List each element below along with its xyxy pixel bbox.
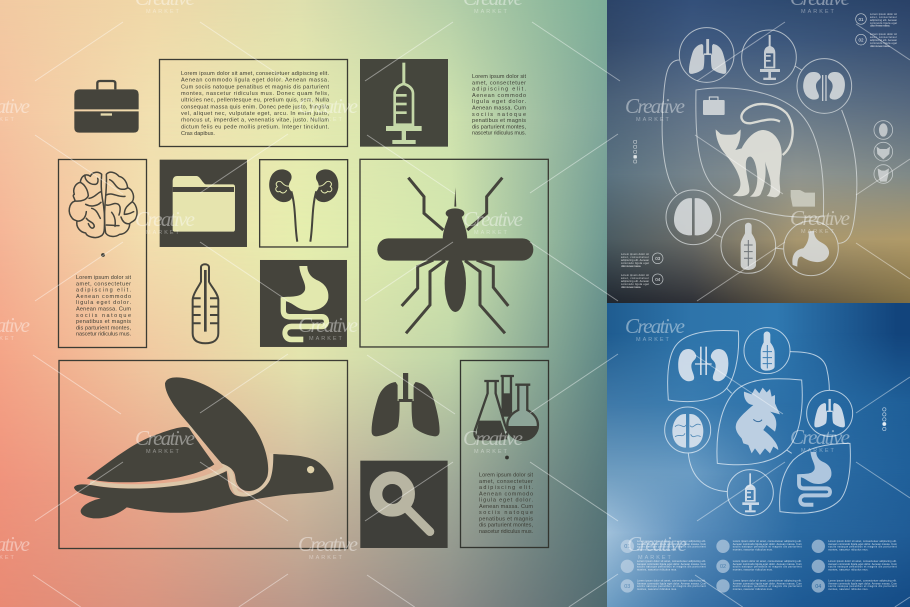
legend: bottom right numbers and text: [624, 540, 897, 591]
marker dot: [101, 253, 105, 257]
text block: flasks box: Aenean commodo: [479, 491, 533, 497]
text box: top: montes, nascetur ridiculus mus. Donec quam felis,: [181, 91, 329, 97]
text block: top right: [472, 74, 526, 137]
legend: bottom right numbers and text: Lorem ipsum dolor sit amet, consectetuer adipiscing elit.: [828, 580, 897, 583]
watermarks: Creative Market: MARKET: [801, 229, 836, 235]
outline network: [665, 328, 853, 516]
text block: brain box: Aenean massa. Cum: [76, 306, 131, 312]
legend: bottom right numbers and text: sociis natoque penatibus et magnis dis parturient: [733, 585, 802, 588]
icon: small briefcase: [703, 97, 725, 115]
legend: bottom right numbers and text: montes, nascetur ridiculus mus.: [637, 568, 677, 571]
legend: bottom right numbers and text: Lorem ipsum dolor sit amet, consectetuer adipiscing elit.: [637, 580, 706, 583]
text box: top: [160, 60, 348, 146]
text block: top right: Lorem ipsum dolor sit: [472, 74, 526, 80]
legend: top right numbers and text: commodo ligula eget: [621, 283, 649, 286]
watermarks: Creative Market: Creative: [790, 206, 850, 230]
legend: top right numbers and text: amet, consectetuer: [621, 256, 649, 259]
text block: brain box: dis parturient montes,: [76, 325, 131, 331]
marker dot: [505, 456, 509, 459]
panel: left main infographic: [58, 59, 548, 549]
legend: top right numbers and text: Lorem ipsum dolor sit: [870, 33, 897, 36]
legend: bottom right numbers and text: Aenean commodo ligula eget dolor. Aenean massa. Cum: [637, 582, 706, 585]
legend: top right numbers and text: adipiscing elit. Aenean: [621, 280, 650, 283]
text block: flasks box: [479, 472, 533, 535]
icon: magnifier tile: [360, 461, 448, 548]
legend: bottom right numbers and text: 04: [815, 584, 821, 590]
icon: thermometer: [193, 264, 218, 343]
legend: top right numbers and text: amet, consectetuer: [621, 277, 649, 280]
icon: small folder: [791, 190, 815, 207]
legend: top right numbers and text: amet, consectetuer: [870, 16, 897, 19]
icon: lungs: [814, 399, 845, 427]
legend: bottom right numbers and text: Lorem ipsum dolor sit amet, consectetuer adipiscing elit.: [733, 580, 802, 583]
legend: bottom right numbers and text: montes, nascetur ridiculus mus.: [828, 548, 869, 551]
icon: briefcase: [74, 81, 139, 133]
legend: top right numbers and text: adipiscing elit. Aenean: [621, 259, 650, 262]
text box: top: Lorem ipsum dolor sit amet, consectetuer adipiscing elit.: [181, 71, 329, 77]
text block: top right: ligula eget dolor.: [472, 99, 526, 105]
icon: thermometer: [761, 331, 775, 371]
legend: top right numbers and text: adipiscing elit. Aenean: [870, 39, 898, 42]
watermarks: Creative Market: MARKET: [474, 230, 509, 236]
panel: top right cat infographic: [634, 14, 893, 285]
panel: flasks box: [460, 360, 548, 548]
icon: folder tile: [160, 160, 247, 247]
watermarks: Creative Market: Creative: [790, 425, 850, 449]
legend: top right numbers and text: [621, 13, 898, 289]
text block: brain box: sociis natoque: [76, 313, 131, 319]
background: left panel gradient: [0, 0, 607, 607]
watermarks: Creative Market: Creative: [298, 94, 358, 118]
legend: top right numbers and text: amet, consectetuer: [870, 36, 897, 39]
side icons: [874, 121, 893, 183]
legend: top right numbers and text: 02: [858, 38, 864, 43]
icon: thermometer: [741, 223, 756, 270]
legend: bottom right numbers and text: Aenean commodo ligula eget dolor. Aenean massa. Cum: [828, 582, 897, 585]
text block: flasks box: sociis natoque: [479, 510, 533, 516]
text block: brain box: adipiscing elit.: [76, 288, 131, 294]
text block: flasks box: ligula eget dolor.: [479, 498, 533, 504]
icon: stomach: [792, 231, 829, 267]
text block: brain box: amet, consectetuer: [76, 281, 131, 287]
watermarks: Creative Market: Creative: [625, 314, 685, 338]
icon: brain silhouette: [674, 198, 712, 235]
text box: top: ultricies nec, pellentesque eu, pretium quis, sem. Nulla: [181, 98, 330, 104]
legend: top right numbers and text: Lorem ipsum dolor sit: [870, 13, 897, 16]
legend: top right numbers and text: dolor. Aenean massa.: [870, 24, 890, 28]
icon: rooster: [736, 388, 780, 455]
watermarks: Creative Market: MARKET: [474, 9, 509, 15]
text block: flasks box: Lorem ipsum dolor sit: [479, 472, 533, 478]
legend: bottom right numbers and text: sociis natoque penatibus et magnis dis parturient: [828, 585, 897, 588]
legend: bottom right numbers and text: sociis natoque penatibus et magnis dis parturient: [828, 566, 897, 569]
text block: brain box: Lorem ipsum dolor sit: [76, 275, 131, 281]
legend: bottom right numbers and text: sociis natoque penatibus et magnis dis parturient: [828, 546, 897, 549]
panel: bottom right rooster infographic: [621, 328, 886, 593]
legend: bottom right numbers and text: montes, nascetur ridiculus mus.: [637, 588, 677, 591]
text block: flasks box: amet, consectetuer: [479, 479, 533, 485]
text box: top: dictum felis eu pede mollis pretium. Integer tincidunt.: [181, 124, 329, 130]
legend: bottom right numbers and text: sociis natoque penatibus et magnis dis parturient: [637, 585, 706, 588]
legend: bottom right numbers and text: Lorem ipsum dolor sit amet, consectetuer adipiscing elit.: [637, 560, 706, 563]
legend: bottom right numbers and text: montes, nascetur ridiculus mus.: [733, 568, 773, 571]
watermarks: Creative Market: Creative: [463, 207, 523, 231]
icon: stomach tile: [260, 260, 347, 347]
icon: syringe: [742, 473, 759, 512]
legend: top right numbers and text: 03: [655, 256, 661, 261]
legend: top right numbers and text: 01: [858, 17, 864, 22]
pagination dots: [883, 408, 886, 431]
legend: bottom right numbers and text: Aenean commodo ligula eget dolor. Aenean massa. Cum: [733, 582, 802, 585]
legend: bottom right numbers and text: Aenean commodo ligula eget dolor. Aenean massa. Cum: [828, 563, 897, 566]
watermarks: Creative Market: Creative: [298, 532, 358, 556]
legend: top right numbers and text: commodo ligula eget: [870, 22, 897, 25]
legend: bottom right numbers and text: sociis natoque penatibus et magnis dis parturient: [637, 546, 706, 549]
icon: kidneys box: [260, 160, 348, 247]
text block: brain box: penatibus et magnis: [76, 319, 131, 325]
icon: brain: [69, 172, 137, 238]
legend: bottom right numbers and text: sociis natoque penatibus et magnis dis parturient: [733, 566, 802, 569]
legend numbers: [652, 14, 866, 285]
legend: top right numbers and text: adipiscing elit. Aenean: [870, 19, 898, 22]
text box: top: rhoncus ut, imperdiet a, venenatis vitae, justo. Nullam: [181, 118, 329, 124]
watermarks: Creative Market: Creative: [135, 426, 195, 450]
text box: top: Aenean commodo ligula eget dolor. Aenean massa.: [181, 78, 329, 84]
text block: top right: penatibus et magnis: [472, 118, 526, 124]
icon: kidneys: [678, 347, 728, 381]
legend: bottom right numbers and text: Lorem ipsum dolor sit amet, consectetuer adipiscing elit.: [637, 540, 706, 543]
legend: bottom right numbers and text: Aenean commodo ligula eget dolor. Aenean massa. Cum: [733, 563, 802, 566]
legend: bottom right numbers and text: Aenean commodo ligula eget dolor. Aenean massa. Cum: [828, 543, 897, 546]
watermarks: Creative Market: MARKET: [146, 9, 181, 15]
icon: lungs: [372, 373, 440, 436]
text box: top: consequat massa quis enim. Donec pede justo, fringilla: [181, 104, 330, 110]
text block: flasks box: penatibus et magnis: [479, 516, 533, 522]
text block: brain box: nascetur ridiculus mus.: [76, 332, 131, 338]
watermarks: Creative Market: MARKET: [801, 448, 836, 454]
watermarks: Creative Market: MARKET: [801, 9, 836, 15]
background: bottom right panel: [607, 303, 910, 607]
text box: top: Cum sociis natoque penatibus et magnis dis parturient: [181, 84, 329, 90]
legend: bottom right numbers and text: 01: [624, 544, 630, 550]
watermarks: Creative Market: MARKET: [638, 555, 673, 561]
legend: bottom right numbers and text: Aenean commodo ligula eget dolor. Aenean massa. Cum: [733, 543, 802, 546]
watermarks: Creative Market: MARKET: [309, 117, 344, 123]
legend: top right numbers and text: dolor. Aenean massa.: [870, 45, 890, 48]
legend: top right numbers and text: Lorem ipsum dolor sit: [621, 253, 649, 256]
legend: bottom right numbers and text: Aenean commodo ligula eget dolor. Aenean massa. Cum: [637, 563, 706, 566]
text block: top right: Aenean massa. Cum: [472, 106, 526, 112]
text block: top right: amet, consectetuer: [472, 80, 526, 86]
side icon glyphs: [877, 123, 890, 182]
legend: top right numbers and text: dolor. Aenean massa.: [621, 286, 641, 289]
watermarks: Creative Market: MARKET: [146, 449, 181, 455]
legend: top right numbers and text: Lorem ipsum dolor sit: [621, 274, 649, 277]
icon: cat: [716, 104, 793, 197]
icon: kidneys: [803, 72, 845, 101]
icon: brain: [672, 414, 703, 448]
watermarks: Creative Market: MARKET: [474, 449, 509, 455]
text box: top: vel, aliquet nec, vulputate eget, arcu. In enim justo,: [181, 111, 329, 117]
text block: brain box: Aenean commodo: [76, 294, 131, 300]
watermarks: Creative Market: Creative: [135, 207, 195, 231]
text block: top right: sociis natoque: [472, 112, 526, 118]
watermarks: Creative Market: Creative: [627, 532, 687, 556]
text block: top right: adipiscing elit.: [472, 87, 526, 93]
legend: top right numbers and text: commodo ligula eget: [621, 262, 649, 265]
legend: bottom right numbers and text: Lorem ipsum dolor sit amet, consectetuer adipiscing elit.: [733, 560, 802, 563]
text block: top right: nascetur ridiculus mus.: [472, 131, 526, 137]
legend: bottom right numbers and text: sociis natoque penatibus et magnis dis parturient: [637, 566, 706, 569]
watermarks: Creative Market: Creative: [625, 94, 685, 118]
legend: bottom right numbers and text: Lorem ipsum dolor sit amet, consectetuer adipiscing elit.: [828, 560, 897, 563]
legend: bottom right numbers and text: montes, nascetur ridiculus mus.: [733, 548, 773, 551]
legend: bottom right numbers and text: montes, nascetur ridiculus mus.: [828, 588, 869, 591]
text block: flasks box: dis parturient montes,: [479, 522, 533, 528]
text block: flasks box: adipiscing elit.: [479, 485, 533, 491]
icon: mosquito box: [360, 159, 548, 347]
watermarks: Creative Market: MARKET: [146, 230, 181, 236]
watermarks: Creative Market: Creative: [463, 426, 523, 450]
pagination dots: [634, 140, 637, 163]
text box: top: Cras dapibus.: [181, 131, 215, 137]
icon: stomach and intestine: [797, 452, 832, 507]
legend: bottom right numbers and text: sociis natoque penatibus et magnis dis parturient: [733, 546, 802, 549]
text block: top right: dis parturient montes,: [472, 124, 526, 130]
text block: brain box: [76, 275, 131, 338]
text block: flasks box: nascetur ridiculus mus.: [479, 529, 533, 535]
text block: top right: Aenean commodo: [472, 93, 526, 99]
icon: lab flasks: [474, 376, 538, 440]
icon: sea turtle: [74, 377, 333, 518]
legend: bottom right numbers and text: Aenean commodo ligula eget dolor. Aenean massa. Cum: [637, 543, 706, 546]
legend: top right numbers and text: dolor. Aenean massa.: [621, 265, 641, 268]
icon: syringe tile: [360, 59, 448, 147]
legend: bottom right numbers and text: Lorem ipsum dolor sit amet, consectetuer adipiscing elit.: [733, 540, 802, 543]
text block: brain box: ligula eget dolor.: [76, 300, 131, 306]
legend: bottom right numbers and text: montes, nascetur ridiculus mus.: [637, 548, 677, 551]
outline network: [662, 28, 857, 276]
icon: lungs: [689, 39, 726, 74]
legend: bottom right numbers and text: montes, nascetur ridiculus mus.: [828, 568, 869, 571]
text block: flasks box: Aenean massa. Cum: [479, 504, 533, 510]
watermarks: Creative Market: MARKET: [309, 336, 344, 342]
legend: top right numbers and text: commodo ligula eget: [870, 42, 897, 45]
background: top right panel: [607, 0, 910, 303]
watermarks: Creative Market: Creative: [298, 313, 358, 337]
watermarks: Creative Market: MARKET: [309, 555, 344, 561]
panel: turtle box: [59, 360, 348, 548]
watermarks: Creative Market: MARKET: [636, 337, 671, 343]
watermarks: Creative Market: MARKET: [636, 117, 671, 123]
icon: syringe: [760, 35, 780, 80]
legend: bottom right numbers and text: Lorem ipsum dolor sit amet, consectetuer adipiscing elit.: [828, 540, 897, 543]
panel: brain box: [58, 160, 146, 348]
legend discs: [621, 540, 825, 593]
legend: bottom right numbers and text: 02: [720, 564, 726, 570]
legend: bottom right numbers and text: 03: [624, 584, 630, 590]
legend: bottom right numbers and text: montes, nascetur ridiculus mus.: [733, 588, 773, 591]
legend: top right numbers and text: 04: [655, 277, 661, 282]
